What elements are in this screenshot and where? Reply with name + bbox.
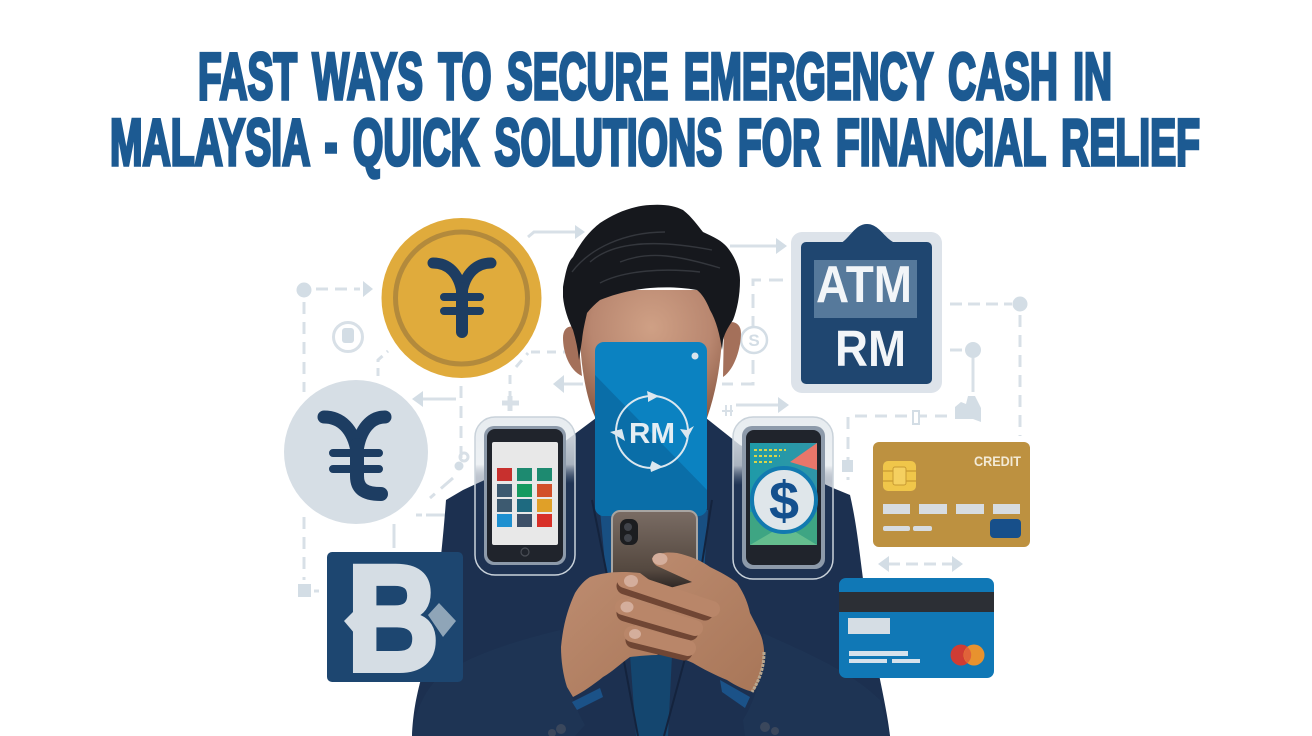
tie (630, 655, 672, 736)
double arrow between cards (878, 556, 963, 572)
lapel shadows (592, 500, 712, 736)
hands holding phone (561, 553, 764, 697)
shirt cuffs (572, 680, 750, 710)
left sleeve (412, 630, 585, 736)
central blue card with RM (595, 342, 707, 516)
right hand (625, 553, 764, 692)
right hand fingers (623, 580, 712, 648)
person in suit (412, 205, 890, 736)
central smartphone (612, 511, 697, 596)
left hand (561, 572, 692, 697)
fingernails (620, 553, 668, 639)
face (580, 290, 723, 440)
right phone with dollar: $ (769, 471, 799, 531)
gold credit card (873, 442, 1030, 547)
suit buttons (548, 722, 779, 736)
ATM sign: ATM (816, 256, 912, 314)
shirt collar area (600, 510, 708, 575)
central blue card with RM: RM (629, 418, 675, 450)
bracelet (752, 652, 764, 692)
title (110, 39, 1200, 179)
ATM sign: RM (835, 320, 906, 377)
icon: grey yen coin (284, 380, 428, 524)
bank B tile: B (347, 534, 439, 702)
icon: gold yuan coin (382, 218, 542, 378)
suit jacket (412, 418, 890, 736)
ears (563, 322, 741, 377)
right sleeve (743, 633, 890, 736)
right phone with dollar (733, 417, 833, 579)
hair sheen (572, 232, 720, 283)
blue bank card (839, 578, 994, 678)
left phone with app grid (475, 417, 575, 575)
gold credit card: CREDIT (974, 453, 1021, 469)
dashed connector network (296, 225, 1028, 597)
finger shadows (625, 586, 705, 652)
dashed connector network: S (748, 331, 760, 350)
hair (563, 205, 740, 360)
ATM sign (791, 224, 942, 393)
